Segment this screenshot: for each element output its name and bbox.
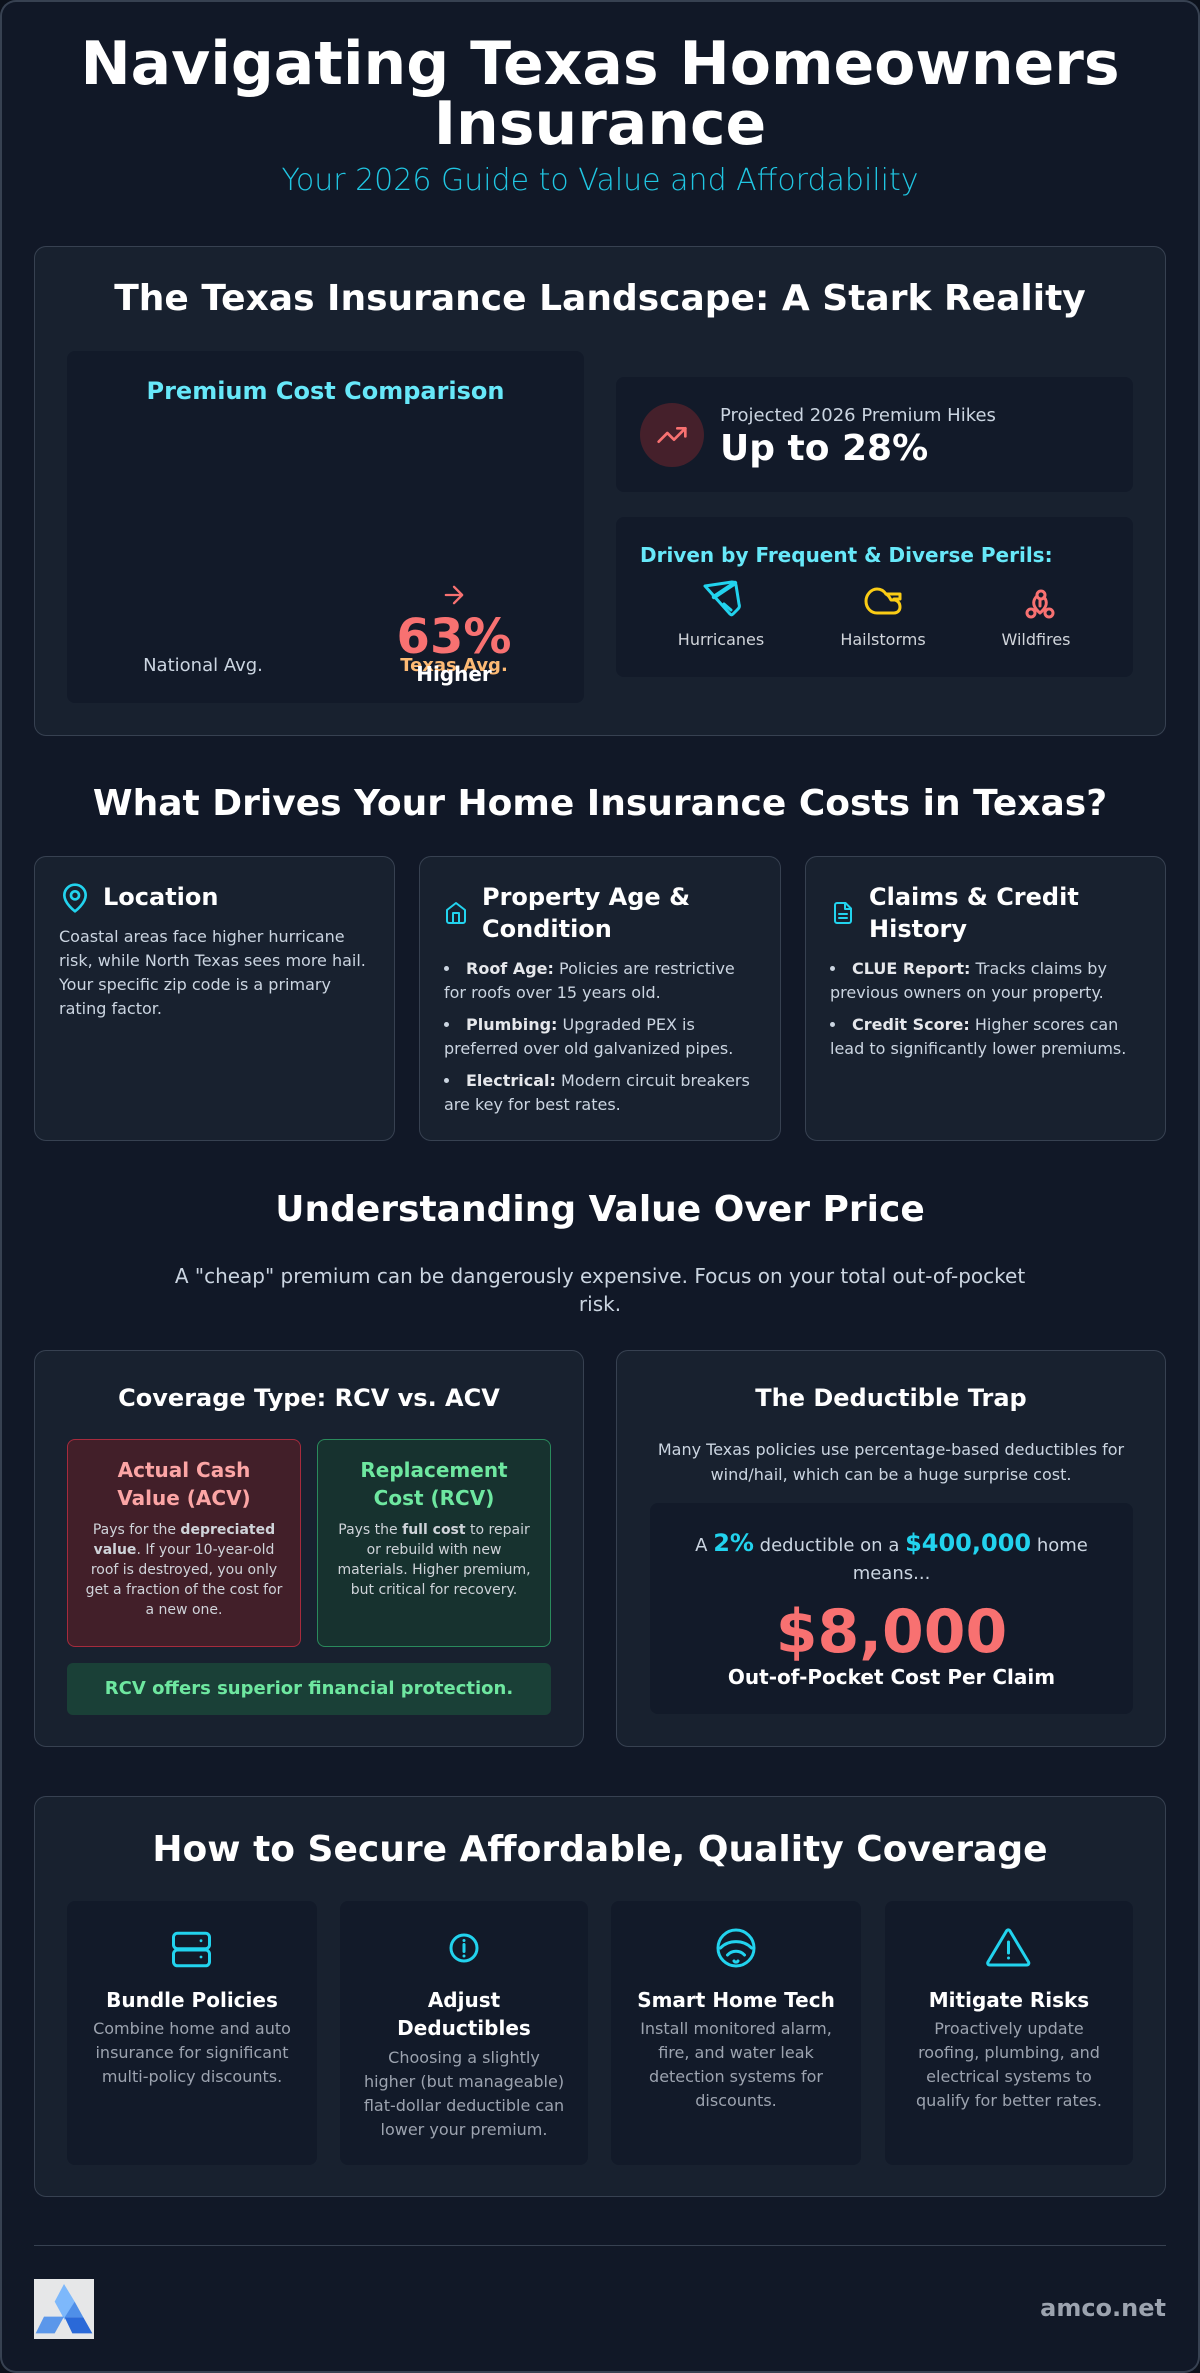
tip text: multi-policy discounts. (102, 2067, 282, 2086)
card title: Claims & Credit (869, 883, 1079, 911)
card: claims and credit (805, 856, 1166, 1141)
bullet list (444, 959, 750, 1114)
ACV title: Value (ACV) (117, 1486, 251, 1510)
example sentence (695, 1529, 1088, 1584)
deductible example (650, 1503, 1133, 1714)
icon: document (834, 902, 852, 924)
panel: how to secure coverage (34, 1796, 1166, 2197)
heading: cost drivers: What Drives Your Home Insurance Costs in Texas? (93, 783, 1107, 824)
RCV text: materials. Higher premium, (337, 1562, 531, 1578)
card: location (34, 856, 395, 1141)
footer link: amco.net (1040, 2294, 1166, 2322)
stat caption: Out-of-Pocket Cost Per Claim (728, 1665, 1055, 1689)
tip title: Deductibles (397, 2016, 531, 2040)
bullet list: CLUE Report: Tracks claims by (852, 959, 1107, 978)
title: Insurance (434, 89, 766, 159)
label: hailstorms: Hailstorms (840, 630, 926, 649)
bullet list: preferred over old galvanized pipes. (444, 1039, 733, 1058)
example sentence: A 2% deductible on a $400,000 home (695, 1529, 1088, 1557)
deductible text: wind/hail, which can be a huge surprise cost. (711, 1465, 1071, 1484)
stat: 8000 dollars: $8,000 (776, 1597, 1007, 1667)
card title: Property Age & (482, 883, 690, 911)
tip text: fire, and water leak (658, 2043, 814, 2062)
tip text: electrical systems to (926, 2067, 1092, 2086)
panel: projected premium hikes (616, 377, 1133, 492)
tip text: flat-dollar deductible can (364, 2096, 564, 2115)
tip title: Adjust (428, 1988, 500, 2012)
bullet list: are key for best rates. (444, 1095, 621, 1114)
tip text: Proactively update (934, 2019, 1084, 2038)
tip text: lower your premium. (381, 2120, 547, 2139)
deductible text (658, 1440, 1124, 1484)
card title (869, 883, 1079, 943)
icon: arrow (444, 586, 464, 604)
stat: up to 28 percent: Up to 28% (720, 428, 928, 469)
panel: coverage type (34, 1350, 584, 1747)
title: Navigating Texas Homeowners (80, 29, 1120, 99)
card: ACV (67, 1439, 301, 1647)
icon: map pin (63, 883, 87, 913)
bullet list: Plumbing: Upgraded PEX is (466, 1015, 695, 1034)
intro text (175, 1264, 1025, 1316)
tip text: higher (but manageable) (364, 2072, 564, 2091)
ACV text: Pays for the depreciated (93, 1522, 275, 1538)
tip text: qualify for better rates. (916, 2091, 1102, 2110)
card body: risk, while North Texas sees more hail. (59, 951, 366, 970)
RCV text: or rebuild with new (367, 1542, 501, 1558)
card body: Your specific zip code is a primary (59, 975, 331, 994)
icon: hurricanes (703, 580, 741, 616)
tip: smart home tech (611, 1901, 861, 2165)
label: national average: National Avg. (143, 655, 263, 676)
icon: server (172, 1932, 211, 1968)
tip text (916, 2019, 1102, 2110)
tip text: Choosing a slightly (388, 2048, 540, 2067)
ACV text: get a fraction of the cost for (86, 1582, 282, 1598)
stat caption: higher: Higher (416, 662, 492, 686)
heading: value over price: Understanding Value Over Price (275, 1189, 925, 1230)
icon: warning triangle (986, 1928, 1030, 1966)
RCV title: Cost (RCV) (374, 1486, 494, 1510)
deductible text: Many Texas policies use percentage-based deductibles for (658, 1440, 1124, 1459)
tip: adjust deductibles (340, 1901, 588, 2165)
icon: info circle (450, 1934, 478, 1962)
bullet list (830, 959, 1126, 1058)
panel: perils (616, 517, 1133, 677)
heading: secure coverage: How to Secure Affordable, Quality Coverage (152, 1829, 1048, 1870)
RCV text: but critical for recovery. (351, 1582, 517, 1598)
heading: coverage type: Coverage Type: RCV vs. ACV (118, 1384, 500, 1412)
perils heading: Driven by Frequent & Diverse Perils: (640, 543, 1053, 567)
bullet list: previous owners on your property. (830, 983, 1104, 1002)
label: hurricanes: Hurricanes (678, 630, 764, 649)
ACV text: roof is destroyed, you only (91, 1562, 277, 1578)
tip text (640, 2019, 832, 2110)
RCV text (337, 1522, 531, 1598)
tip text (93, 2019, 291, 2086)
panel: deductible trap (616, 1350, 1166, 1747)
title (80, 29, 1120, 159)
label: projected hikes: Projected 2026 Premium Hikes (720, 405, 996, 426)
card body (59, 927, 366, 1018)
label: wildfires: Wildfires (1002, 630, 1070, 649)
panel: premium cost comparison chart (67, 351, 584, 703)
tip title: Mitigate Risks (929, 1988, 1089, 2012)
tip text: insurance for significant (95, 2043, 288, 2062)
RCV title (360, 1458, 508, 1510)
stat: 63 percent: 63% (397, 609, 511, 665)
heading: deductible trap: The Deductible Trap (755, 1384, 1027, 1412)
card title: History (869, 915, 967, 943)
bullet list: Credit Score: Higher scores can (852, 1015, 1118, 1034)
icon: home (446, 902, 466, 924)
ACV text: a new one. (146, 1602, 222, 1618)
bullet list: for roofs over 15 years old. (444, 983, 661, 1002)
intro text: risk. (579, 1292, 621, 1316)
panel: Texas insurance landscape (34, 246, 1166, 736)
card title (482, 883, 690, 943)
tip text: Combine home and auto (93, 2019, 291, 2038)
tip text: Install monitored alarm, (640, 2019, 832, 2038)
card title: Location (103, 883, 218, 911)
tip title (397, 1988, 531, 2040)
card: RCV (317, 1439, 551, 1647)
heading: landscape: The Texas Insurance Landscape: A Stark Reality (114, 278, 1086, 319)
tip: bundle policies (67, 1901, 317, 2165)
RCV title: Replacement (360, 1458, 508, 1482)
ACV title: Actual Cash (118, 1458, 250, 1482)
bullet list: Roof Age: Policies are restrictive (466, 959, 735, 978)
card title: Condition (482, 915, 612, 943)
example sentence: means... (853, 1563, 930, 1584)
ACV title (117, 1458, 251, 1510)
bullet list: Electrical: Modern circuit breakers (466, 1071, 750, 1090)
card body: Coastal areas face higher hurricane (59, 927, 345, 946)
tip text (364, 2048, 564, 2139)
card: property age (419, 856, 781, 1141)
intro text: A "cheap" premium can be dangerously expensive. Focus on your total out-of-pocket (175, 1264, 1025, 1288)
chart title: Premium Cost Comparison (146, 377, 504, 405)
logo (34, 2279, 94, 2339)
callout: RCV superior: RCV offers superior financial protection. (105, 1678, 513, 1699)
tip text: detection systems for (649, 2067, 823, 2086)
tip: mitigate risks (885, 1901, 1133, 2165)
subtitle: Your 2026 Guide to Value and Affordability (282, 163, 918, 198)
icon: wildfires (1026, 590, 1054, 618)
bullet list: lead to significantly lower premiums. (830, 1039, 1126, 1058)
icon: hailstorms (864, 588, 902, 614)
tip title: Bundle Policies (106, 1988, 278, 2012)
tip title: Smart Home Tech (637, 1988, 835, 2012)
ACV text (86, 1522, 282, 1618)
callout: RCV superior (67, 1663, 551, 1715)
tip text: discounts. (695, 2091, 777, 2110)
label: Texas average: Texas Avg. (400, 655, 508, 676)
ACV text: value. If your 10-year-old (94, 1542, 274, 1558)
icon: wifi circle (716, 1928, 756, 1968)
card body: rating factor. (59, 999, 162, 1018)
tip text: roofing, plumbing, and (918, 2043, 1100, 2062)
RCV text: Pays the full cost to repair (338, 1522, 530, 1538)
icon: trending up (640, 403, 704, 467)
